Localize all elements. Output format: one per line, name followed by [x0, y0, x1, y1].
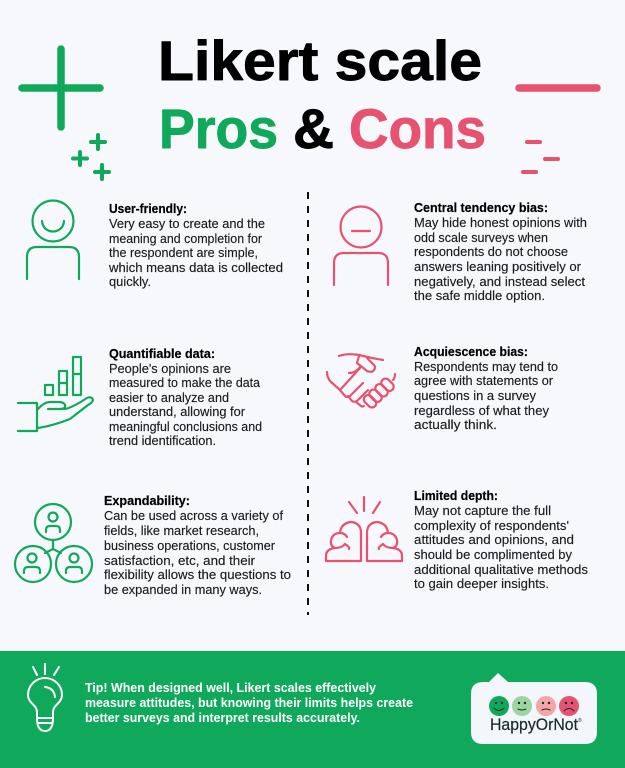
- text: acquiescence bias: actually think.: [414, 417, 497, 432]
- text: quantifiable data: meaningful conclusions and: [109, 419, 262, 434]
- text: user-friendly: User-friendly:: [109, 201, 187, 216]
- text: user-friendly: meaning and completion for: [109, 231, 263, 246]
- text: acquiescence bias: questions in a survey: [414, 388, 536, 403]
- text: quantifiable data: [109, 346, 262, 448]
- logo: HappyOrNot speech bubble: [471, 673, 597, 744]
- text: limited depth: [414, 488, 588, 591]
- text: limited depth: complexity of respondents': [414, 518, 569, 533]
- text: limited depth: May not capture the full: [414, 503, 551, 518]
- text: tip: better surveys and interpret results accurately.: [85, 711, 360, 725]
- title: [158, 29, 486, 160]
- text: quantifiable data: easier to analyze and: [109, 390, 229, 405]
- text: quantifiable data: measured to make the data: [109, 375, 261, 390]
- text: expandability: [104, 493, 291, 597]
- text: expandability: be expanded in many ways.: [104, 582, 262, 597]
- text: quantifiable data: understand, allowing for: [109, 404, 246, 419]
- title: Likert scale: [158, 29, 482, 92]
- title: &: [293, 97, 334, 160]
- logo wordmark: ®: [578, 717, 582, 724]
- text: central tendency bias: answers leaning positively or: [414, 259, 582, 274]
- text: acquiescence bias: regardless of what they: [414, 403, 549, 418]
- icon: brain halves with rays: [326, 497, 402, 561]
- text: limited depth: Limited depth:: [414, 488, 498, 503]
- icon: large red minus with small minus signs: [519, 88, 597, 172]
- text: user-friendly: quickly.: [109, 274, 151, 289]
- text: acquiescence bias: [414, 344, 558, 432]
- text: acquiescence bias: Acquiescence bias:: [414, 344, 528, 359]
- icon: very happy face: [489, 696, 509, 716]
- text: central tendency bias: respondents do not choose: [414, 244, 568, 259]
- panel: tip footer: [0, 651, 625, 768]
- text: user-friendly: which means data is collected: [108, 260, 283, 275]
- text: tip: Tip! When designed well, Likert scales effectively: [85, 681, 376, 695]
- text: limited depth: attitudes and opinions, and: [414, 532, 574, 547]
- text: user-friendly: [108, 201, 283, 289]
- text: central tendency bias: [414, 200, 587, 303]
- text: expandability: business operations, customer: [104, 538, 276, 553]
- text: quantifiable data: Quantifiable data:: [109, 346, 215, 361]
- icon: handshake: [327, 354, 395, 409]
- logo wordmark: HappyOrNot: [490, 715, 578, 734]
- panel: cons: [326, 200, 588, 591]
- text: user-friendly: Very easy to create and the: [109, 216, 265, 231]
- text: central tendency bias: May hide honest opinions with: [414, 215, 587, 230]
- icon: unhappy face: [536, 696, 556, 716]
- icon: hand holding bar chart: [18, 357, 93, 431]
- text: acquiescence bias: agree with statements or: [414, 373, 554, 388]
- text: central tendency bias: odd scale surveys when: [414, 230, 548, 245]
- text: central tendency bias: the safe middle option.: [414, 288, 545, 303]
- text: tip: measure attitudes, but knowing their limits helps create: [85, 696, 413, 710]
- title: Cons: [349, 97, 486, 160]
- icon: large green plus with small plus signs: [22, 49, 109, 179]
- text: expandability: satisfaction, etc, and their: [104, 553, 256, 568]
- icon: happy face: [512, 696, 532, 716]
- text: limited depth: should be complimented by: [414, 547, 572, 562]
- title: Pros: [159, 97, 278, 160]
- text: expandability: flexibility allows the questions to: [104, 567, 291, 582]
- text: expandability: fields, like market research,: [104, 523, 259, 538]
- icon: light bulb: [28, 664, 62, 731]
- panel: pros: [15, 200, 291, 597]
- text: acquiescence bias: Respondents may tend to: [414, 359, 558, 374]
- text: quantifiable data: trend identification.: [109, 433, 216, 448]
- text: limited depth: to gain deeper insights.: [414, 576, 549, 591]
- text: expandability: Can be used across a variety of: [104, 508, 283, 523]
- text: quantifiable data: People's opinions are: [109, 361, 231, 376]
- text: user-friendly: the respondent are simple,: [109, 245, 258, 260]
- text: expandability: Expandability:: [104, 493, 190, 508]
- centre dashed divider: [307, 192, 309, 615]
- text: central tendency bias: negatively, and instead select: [414, 274, 585, 289]
- text: limited depth: additional qualitative methods: [414, 562, 588, 577]
- icon: very unhappy face: [559, 696, 579, 716]
- text: central tendency bias: Central tendency bias:: [414, 200, 548, 215]
- text: tip: [85, 681, 413, 725]
- icon: neutral person: [334, 206, 388, 285]
- icon: connected people network: [15, 504, 92, 582]
- icon: smiling person: [27, 200, 79, 279]
